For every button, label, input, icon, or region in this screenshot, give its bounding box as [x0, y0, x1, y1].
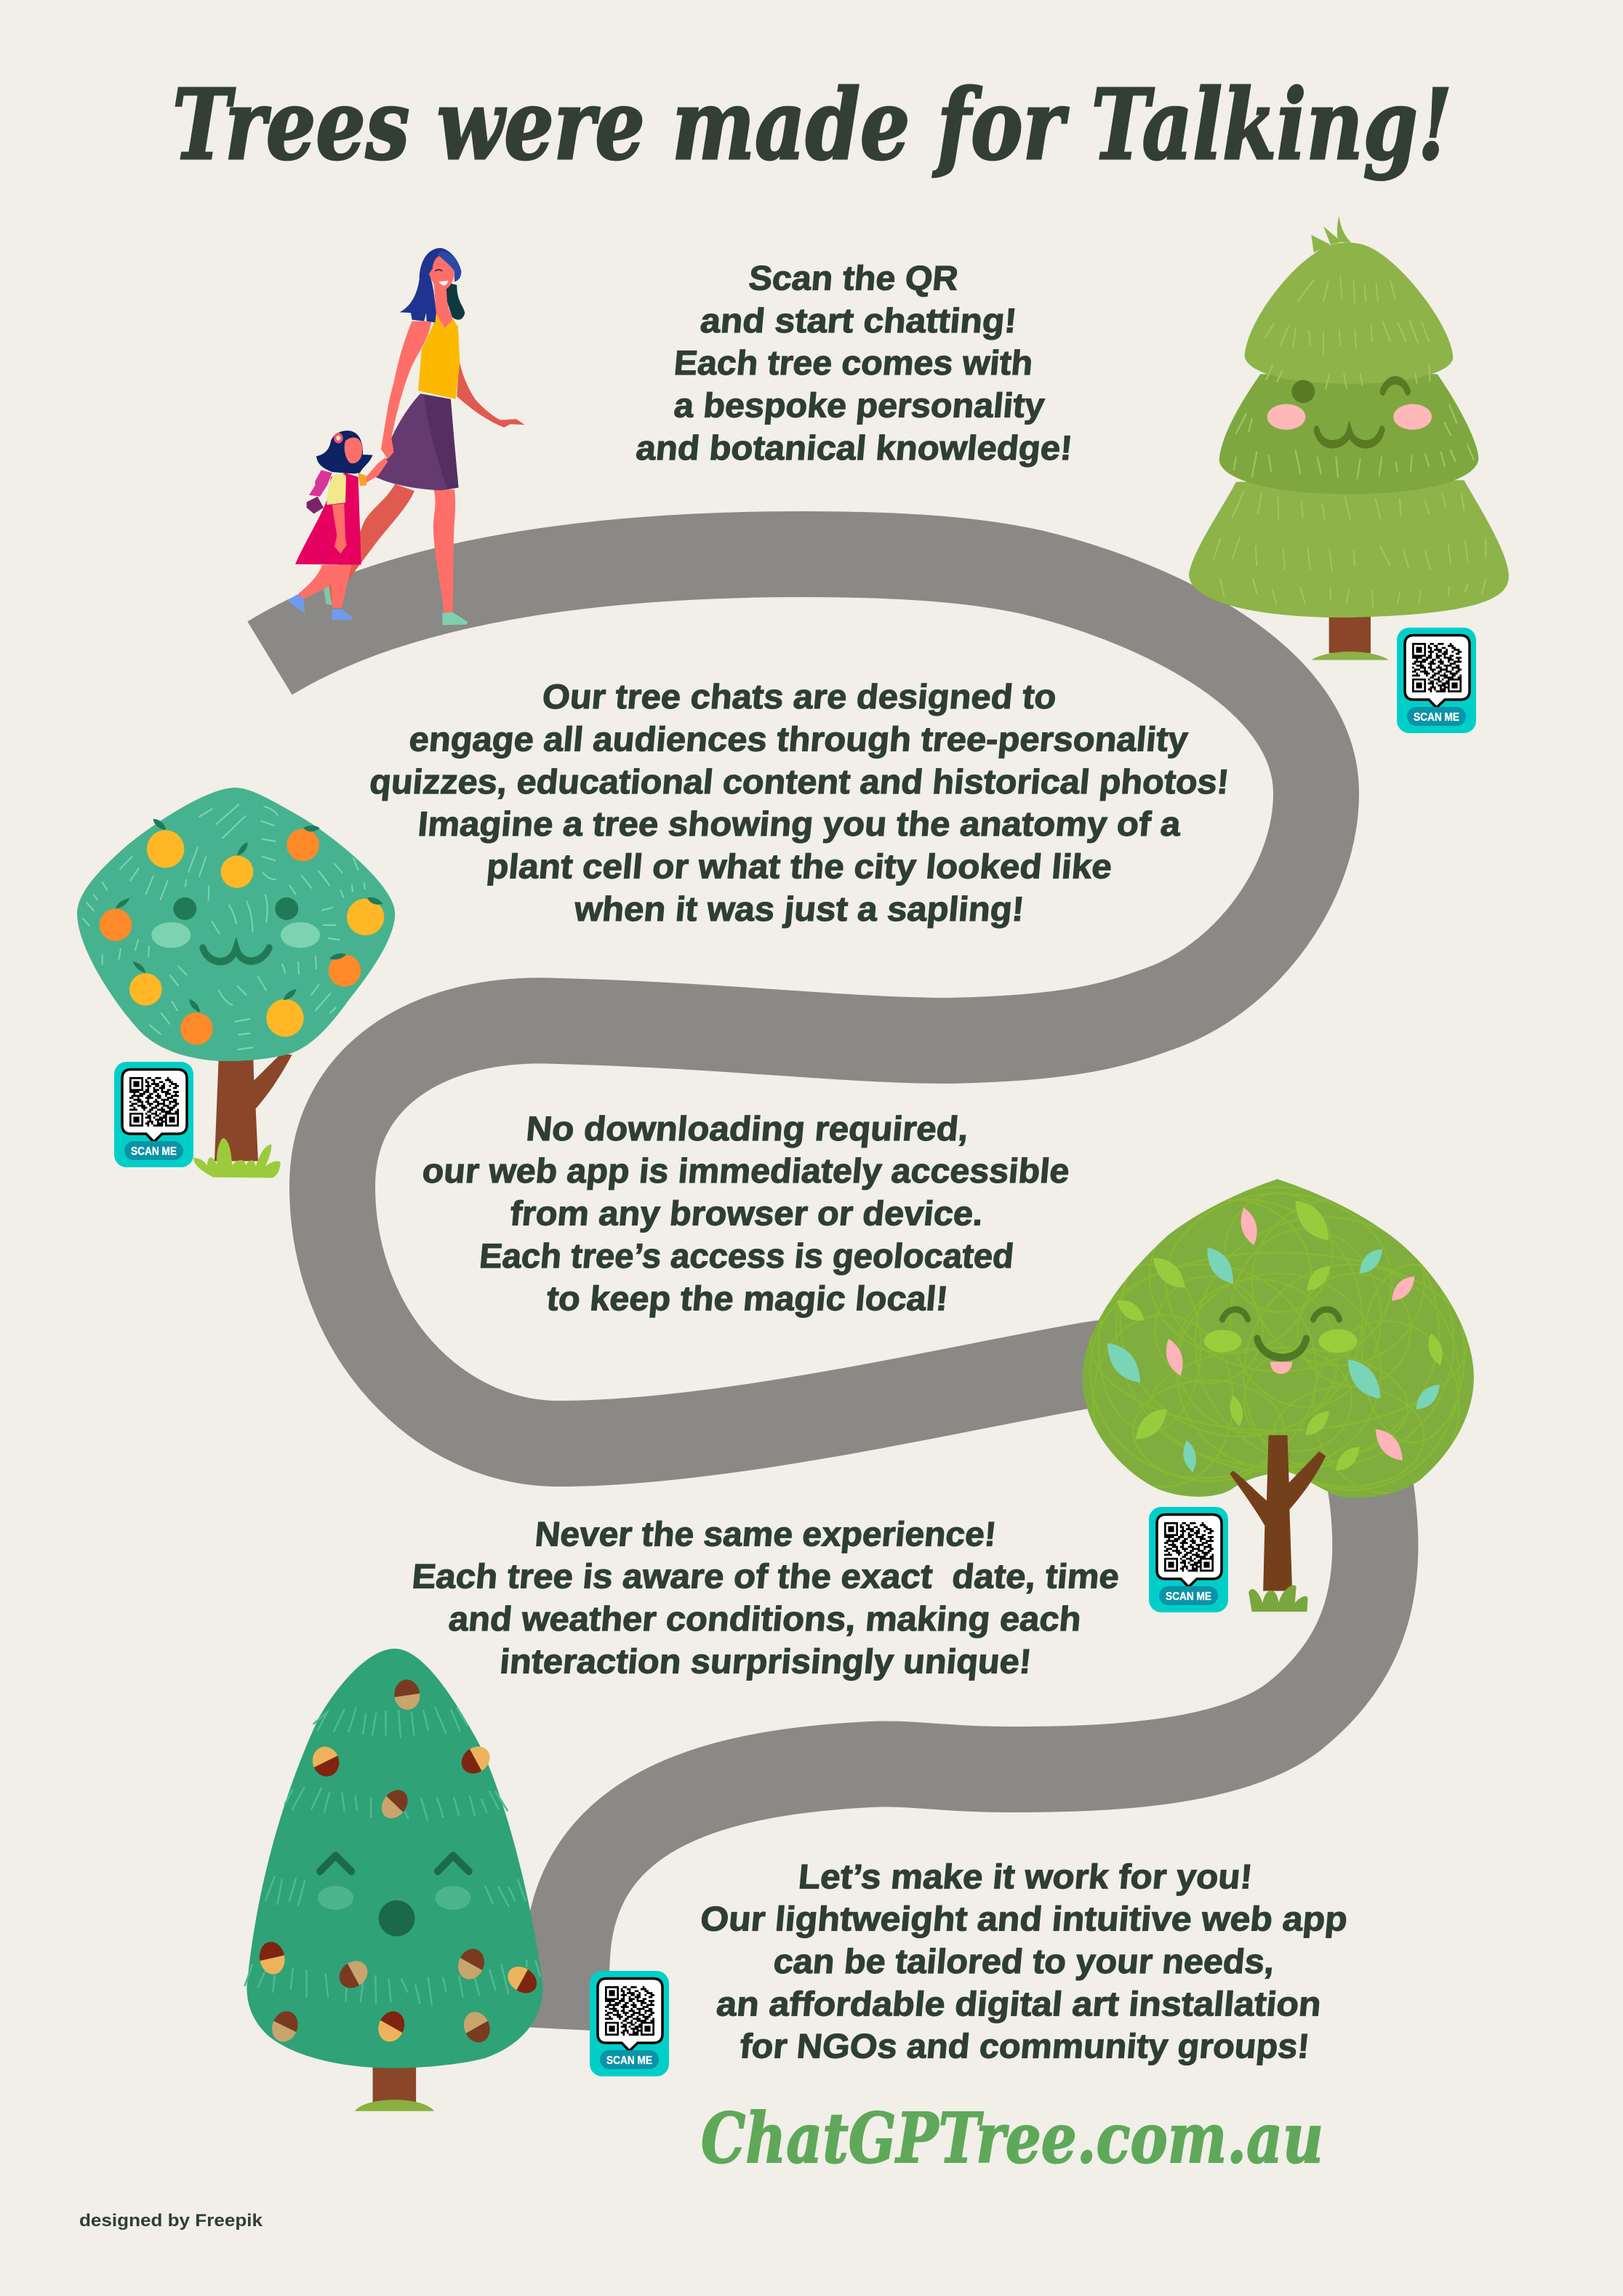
face [318, 1855, 471, 1936]
trunk and ground [355, 2066, 434, 2111]
text block: scan the QR: a bespoke personality [673, 387, 1046, 425]
canopy [77, 788, 395, 1061]
text block: no downloading: No downloading required, [525, 1110, 970, 1148]
text block: no downloading: Each tree’s access is geolocated [478, 1237, 1015, 1276]
child [287, 431, 394, 620]
face [151, 897, 320, 961]
fruits [100, 819, 384, 1045]
acorns [257, 1678, 541, 2047]
tree: acorn fir [245, 1649, 543, 2111]
tree: heart-shaped tree [1082, 1179, 1474, 1612]
text block: engaging all audiences: Imagine a tree showing you the anatomy of a [417, 805, 1182, 844]
tree: orange tree [77, 788, 395, 1177]
foliage [245, 1649, 543, 2068]
text block: make it work for you: Our lightweight and intuitive web app [699, 1900, 1349, 1939]
text block: make it work for you: an affordable digital art installation [715, 1985, 1323, 2023]
text block: no downloading [421, 1110, 1071, 1318]
illustration: woman and child walking [287, 248, 525, 625]
text block: never the same: Each tree is aware of the exact date, time [411, 1558, 1121, 1596]
canopy [1082, 1179, 1474, 1498]
trunk [1230, 1435, 1326, 1591]
text block: never the same [411, 1515, 1121, 1681]
text block: never the same: Never the same experience! [534, 1515, 998, 1553]
text block: never the same: and weather conditions, making each [447, 1600, 1083, 1639]
text block: no downloading: from any browser or device. [508, 1195, 985, 1233]
QR badge: acorn fir: SCAN ME [606, 2055, 652, 2067]
credit: designed by Freepik [79, 2211, 263, 2231]
grass [1249, 1585, 1308, 1612]
text block: no downloading: our web app is immediately accessible [421, 1152, 1071, 1191]
leaves [1107, 1201, 1443, 1472]
QR badge: orange tree [114, 1062, 193, 1167]
text block: engaging all audiences: Our tree chats are designed to [541, 678, 1058, 716]
QR badge: orange tree: SCAN ME [131, 1145, 177, 1158]
QR badge: heart tree [1149, 1507, 1228, 1612]
text block: never the same: interaction surprisingly unique! [498, 1642, 1033, 1681]
winding road [270, 554, 1375, 2029]
text block: make it work for you: can be tailored to your needs, [772, 1943, 1276, 1981]
text block: scan the QR: Scan the QR [747, 260, 960, 297]
foliage tiers [1189, 216, 1509, 617]
QR badge: acorn fir [590, 1971, 669, 2076]
text block: engaging all audiences: quizzes, educational content and historical photos! [368, 763, 1230, 801]
trunk and ground [1311, 614, 1389, 660]
text block: engaging all audiences: engage all audiences through tree-personality [408, 721, 1190, 759]
grass [193, 1138, 281, 1177]
text block: scan the QR: Each tree comes with [673, 344, 1035, 383]
website url: ChatGPTree.com.au [701, 2098, 1323, 2179]
trunk [215, 1053, 292, 1161]
QR badge: pine tree [1397, 628, 1476, 733]
text block: scan the QR [635, 260, 1074, 468]
text block: make it work for you: Let’s make it work for you! [797, 1857, 1254, 1896]
woman [324, 248, 525, 625]
QR badge: pine tree: SCAN ME [1414, 711, 1459, 724]
face [1204, 1309, 1358, 1374]
text block: scan the QR: and start chatting! [699, 302, 1018, 340]
tree: winking green pine [1189, 216, 1509, 660]
text block: engaging all audiences: when it was just a sapling! [572, 890, 1025, 929]
text block: no downloading: to keep the magic local! [545, 1279, 950, 1318]
text block: make it work for you [699, 1857, 1349, 2066]
text block: engaging all audiences [368, 678, 1230, 929]
text block: scan the QR: and botanical knowledge! [635, 429, 1074, 468]
text block: make it work for you: for NGOs and community groups! [738, 2028, 1311, 2066]
face [1267, 380, 1432, 444]
QR badge: heart tree: SCAN ME [1166, 1591, 1211, 1603]
text block: engaging all audiences: plant cell or what the city looked like [485, 848, 1113, 887]
